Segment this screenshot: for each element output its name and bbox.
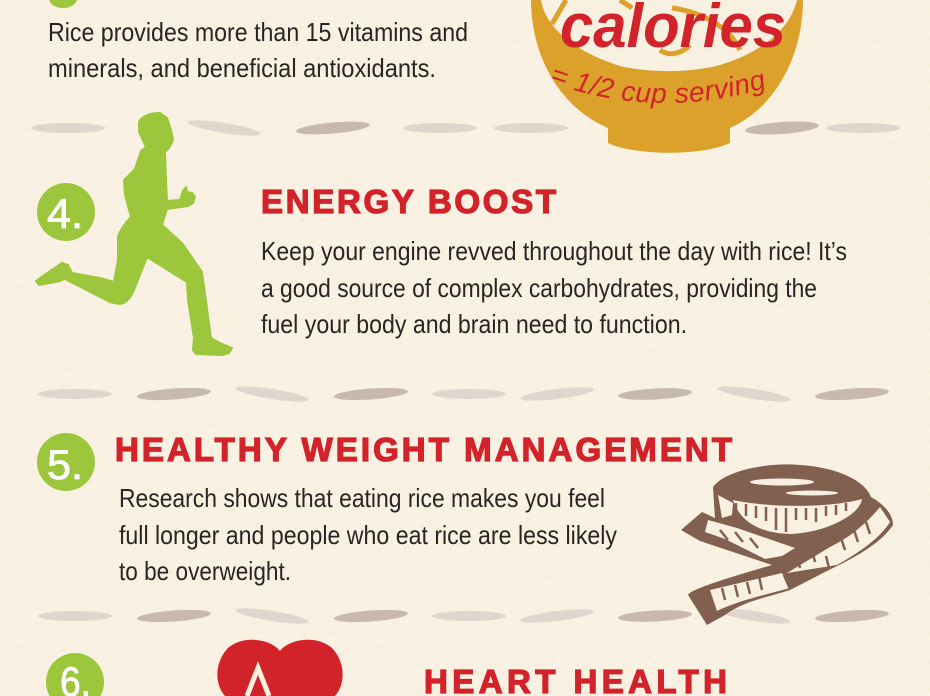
number badge 4 xyxy=(37,183,95,241)
rice grain divider: row 1 xyxy=(31,117,900,139)
text block: weight management: Research shows that eating rice makes you feel xyxy=(119,483,605,513)
number badge 4: 4. xyxy=(47,190,83,237)
text block: energy boost: fuel your body and brain need to function. xyxy=(261,309,687,339)
text block: weight management: full longer and people who eat rice are less likely xyxy=(119,520,617,550)
text block: vitamins and minerals: minerals, and beneficial antioxidants. xyxy=(48,53,436,83)
icon: green runner silhouette xyxy=(36,113,232,355)
heading: healthy weight management: HEALTHY WEIGHT MANAGEMENT xyxy=(115,431,732,468)
text block: weight management: to be overweight. xyxy=(119,556,291,586)
rice grain divider: row 3 xyxy=(38,605,889,627)
text block: vitamins and minerals xyxy=(48,17,468,83)
text block: weight management xyxy=(119,483,617,586)
number badge 6 (cropped) xyxy=(46,653,104,696)
number badge 5: 5. xyxy=(47,441,83,488)
text block: energy boost: a good source of complex carbohydrates, providing the xyxy=(261,273,817,303)
heading: energy boost: ENERGY BOOST xyxy=(261,183,556,220)
rice grain divider: row 2 xyxy=(38,383,889,405)
icon: heart with pulse line (cropped) xyxy=(217,640,343,696)
text block: energy boost xyxy=(261,236,847,339)
text block: vitamins and minerals: Rice provides more than 15 vitamins and xyxy=(48,17,468,47)
text block: energy boost: Keep your engine revved throughout the day with rice! It’s xyxy=(261,236,847,266)
icon: rice bowl with calories: = 1/2 cup serving xyxy=(552,70,764,109)
number badge 5 xyxy=(37,433,95,491)
icon: measuring tape xyxy=(681,464,893,625)
number badge 3 (cropped) xyxy=(49,0,77,8)
icon: rice bowl with calories xyxy=(531,0,803,153)
